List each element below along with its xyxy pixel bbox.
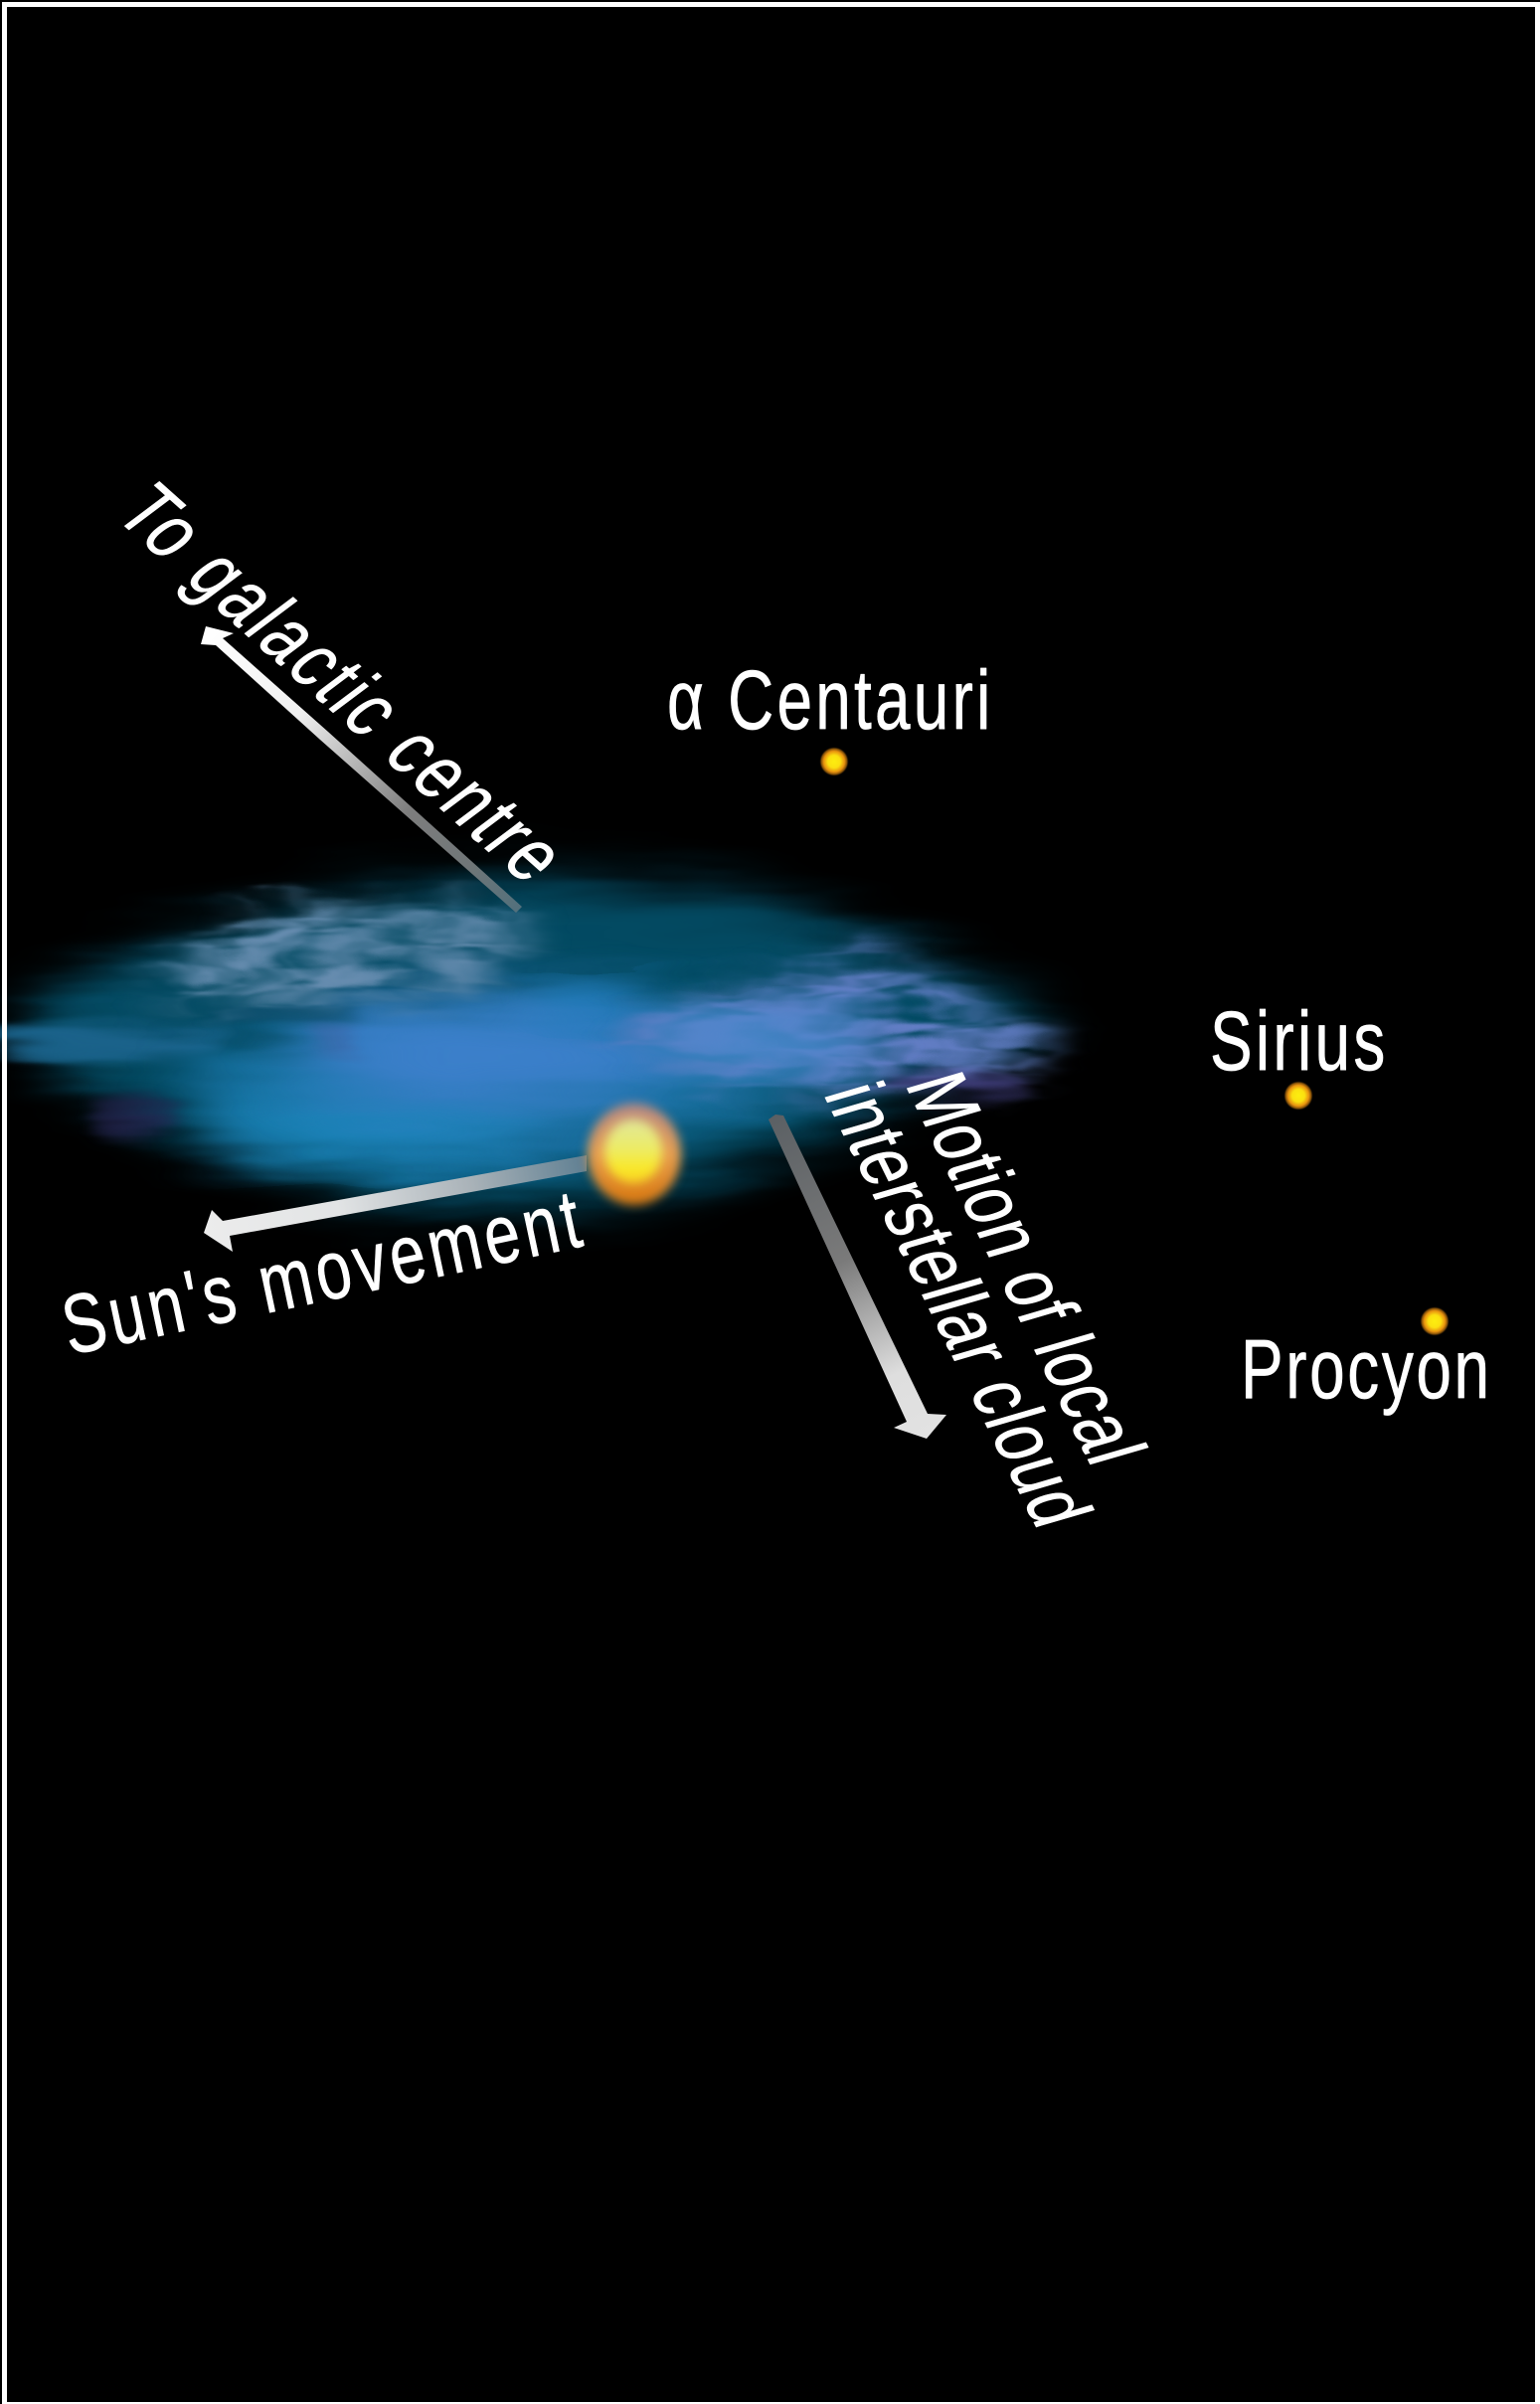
icon: Sirius star (1283, 1081, 1313, 1111)
label: Motion of local interstellar cloud: Motion of local (888, 1063, 1165, 1473)
arrow: Sun's movement (204, 1155, 587, 1252)
icon: alpha Centauri star (819, 747, 849, 776)
arrow: motion of local interstellar cloud (769, 1115, 946, 1439)
icon: Sun (588, 1104, 681, 1205)
right cloud wisps (606, 954, 1059, 1099)
purple cloud edges (885, 1072, 1024, 1100)
label: alpha Centauri: α Centauri (667, 652, 990, 747)
label: To galactic centre: To galactic centre (98, 469, 587, 896)
label: Motion of local interstellar cloud: interstellar cloud (806, 1073, 1112, 1536)
dark band under wisps (209, 1009, 358, 1029)
icon: Procyon star (1420, 1306, 1450, 1336)
local interstellar cloud (0, 875, 1059, 1211)
upper-left cloud wisps (134, 907, 542, 1004)
label: Sun's movement: Sun's movement (54, 1171, 589, 1373)
label: Sirius: Sirius (1210, 993, 1385, 1088)
label: Procyon: Procyon (1241, 1321, 1489, 1416)
arrow: to galactic centre (201, 626, 522, 913)
